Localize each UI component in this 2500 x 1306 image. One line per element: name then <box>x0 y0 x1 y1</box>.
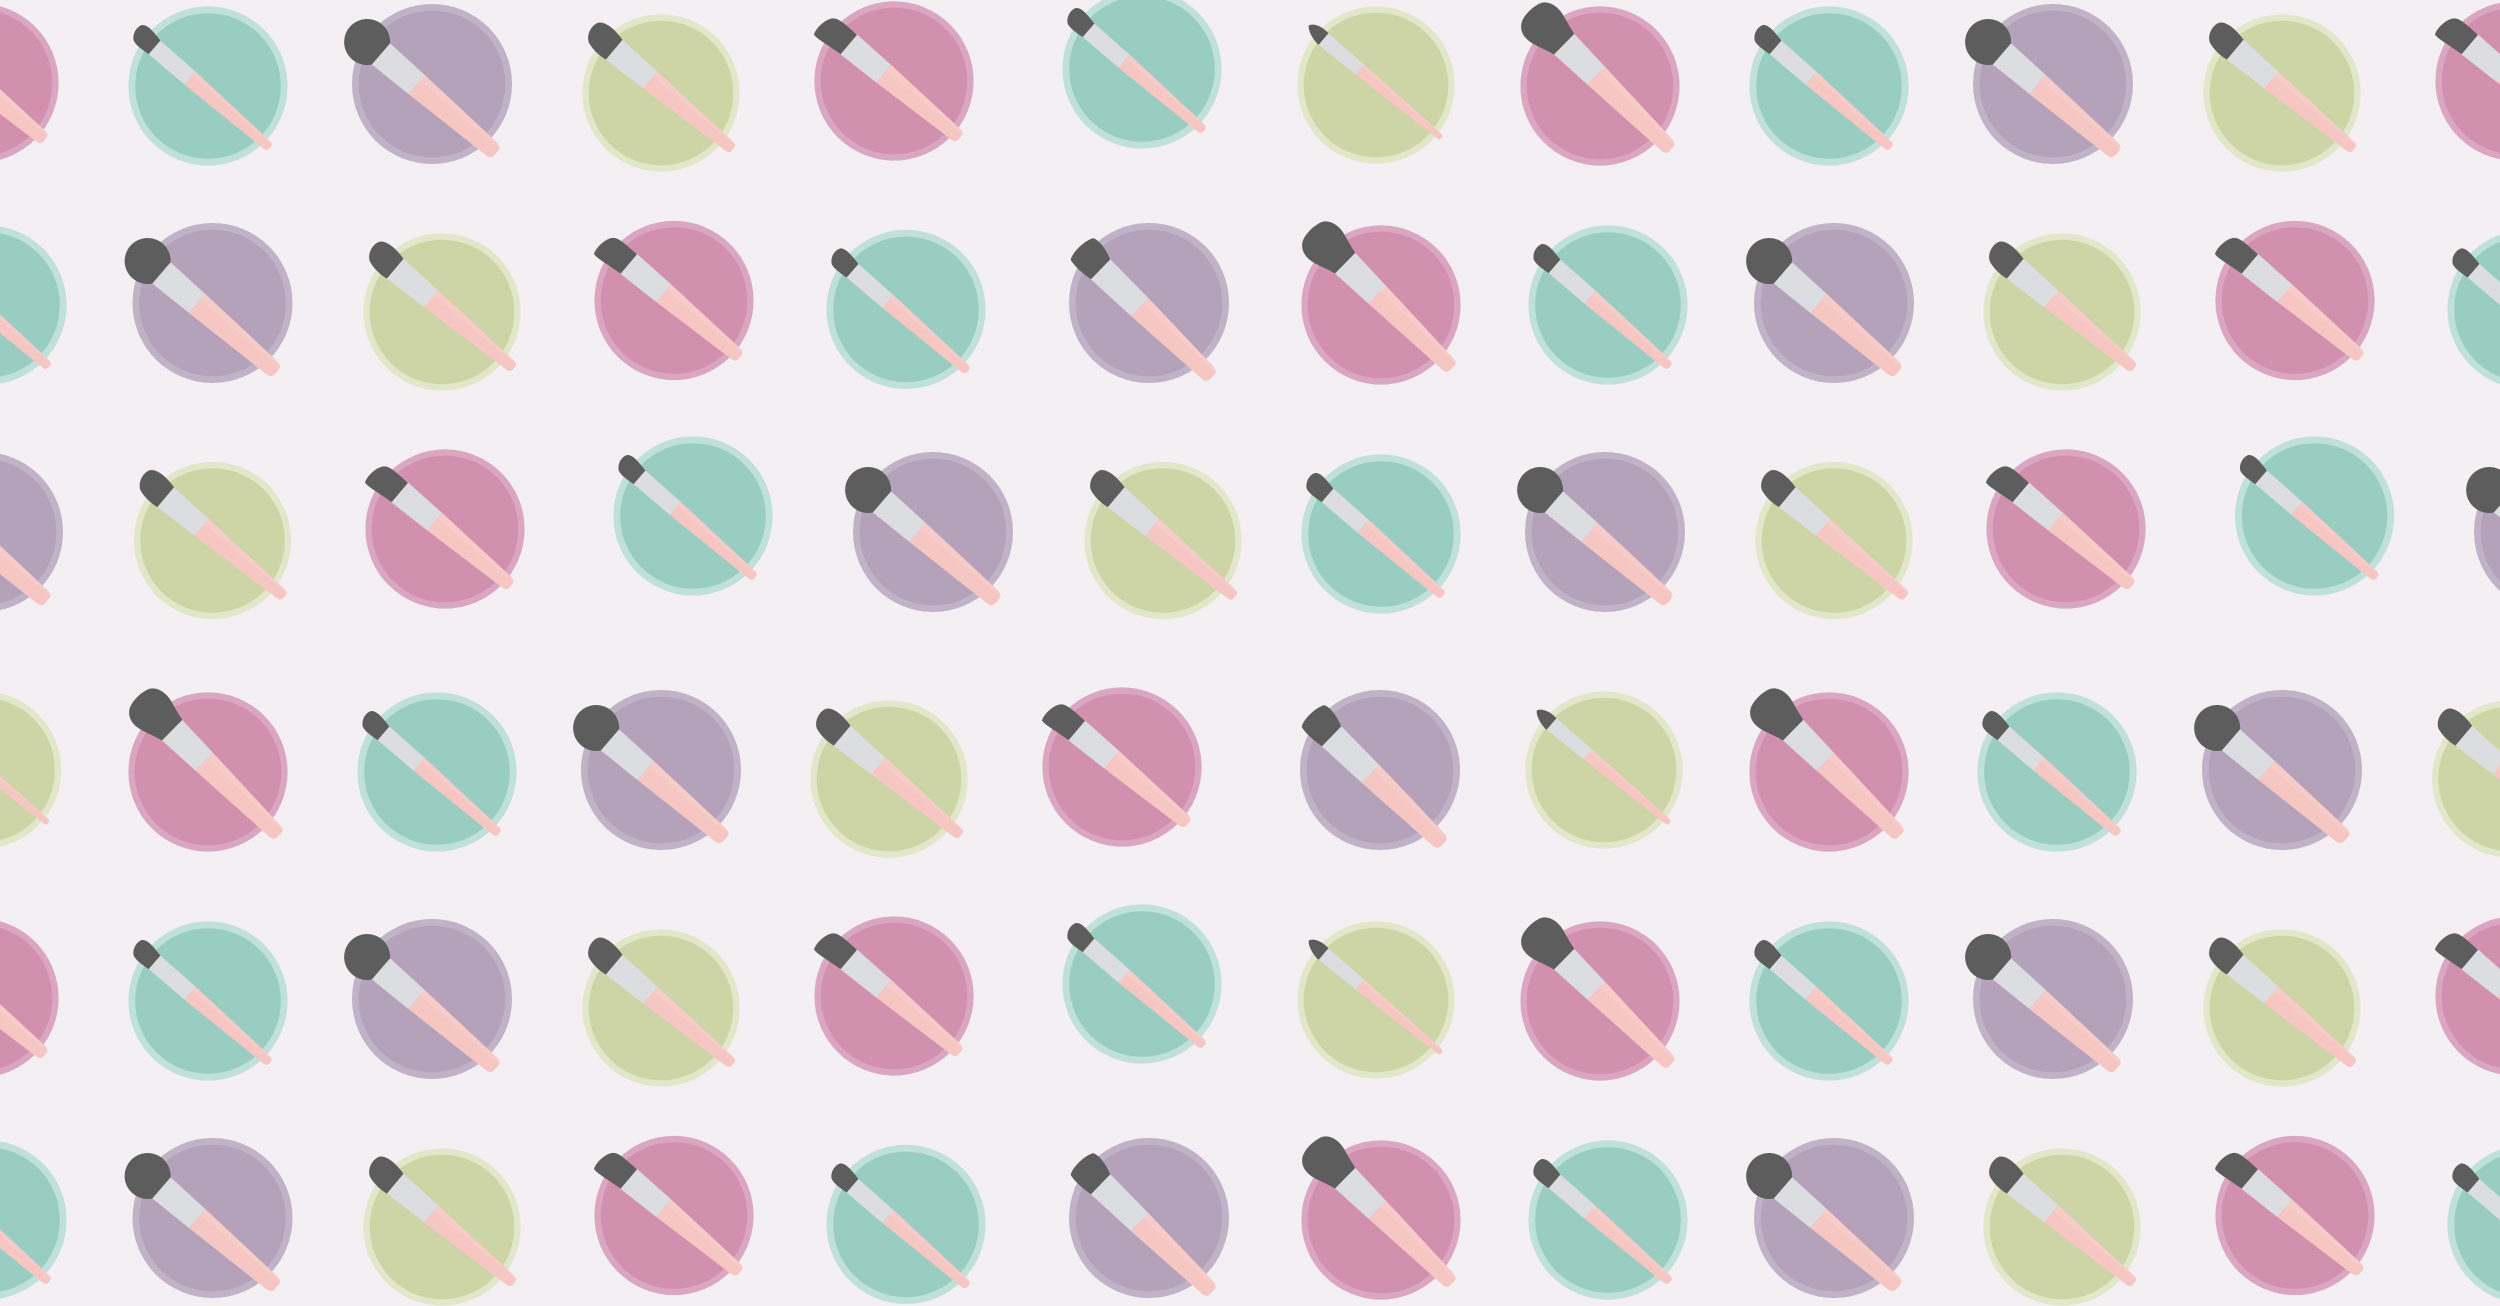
icon: teal disc with brush <box>826 1145 986 1304</box>
icon: purple disc with brush <box>1737 1138 1914 1304</box>
icon: green disc with brush <box>581 14 743 172</box>
icon: teal disc with brush <box>1062 904 1222 1064</box>
icon: pink disc with brush <box>593 221 754 380</box>
icon: teal disc with brush <box>826 230 986 389</box>
icon: purple disc with brush <box>115 223 293 389</box>
icon: green disc with brush <box>133 462 294 619</box>
icon: teal disc with brush <box>128 921 288 1081</box>
icon: green disc with thin brush <box>1297 6 1455 164</box>
icon: purple disc with brush <box>564 690 741 856</box>
icon: pink disc with brush <box>2214 221 2375 380</box>
icon: pink disc with brush <box>0 3 59 163</box>
icon: pink disc with brush <box>593 1136 754 1295</box>
icon: purple disc with brush <box>1737 223 1914 389</box>
icon: pink disc with brush <box>364 449 525 609</box>
icon: green disc with brush <box>1982 1148 2144 1306</box>
icon: green disc with brush <box>809 700 971 858</box>
icon: green disc with brush <box>1754 462 1916 619</box>
icon: teal disc with brush <box>1528 225 1688 385</box>
icon: pink disc with brush <box>2434 1 2500 161</box>
icon: pink disc with large brush <box>122 681 294 852</box>
icon: teal disc with brush <box>128 6 288 166</box>
icon: green disc with brush <box>2202 14 2364 172</box>
icon: green disc with brush <box>1083 462 1245 619</box>
icon: teal disc with brush <box>2447 230 2500 389</box>
icon: purple disc with brush <box>335 919 512 1085</box>
icon: purple disc with brush <box>335 4 512 170</box>
icon: green disc with brush <box>1982 233 2144 391</box>
icon: teal disc with brush <box>0 1140 67 1300</box>
icon: pink disc with large brush <box>1295 1129 1467 1300</box>
icon: purple disc with brush <box>2185 690 2362 856</box>
icon: purple disc with brush <box>0 452 63 618</box>
icon: teal disc with brush <box>1301 454 1461 614</box>
icon: purple disc with brush <box>1508 452 1685 618</box>
icon: teal disc with brush <box>1528 1140 1688 1300</box>
icon: purple disc with brush <box>1068 1138 1229 1303</box>
icon: purple disc with brush <box>1299 690 1460 855</box>
icon: pink disc with brush <box>813 916 974 1076</box>
icon: pink disc with brush <box>0 918 59 1078</box>
icon: pink disc with brush <box>1985 449 2146 609</box>
icon: purple disc with brush <box>836 452 1013 618</box>
icon: purple disc with brush <box>1068 223 1229 388</box>
icon: teal disc with brush <box>0 225 67 385</box>
icon: teal disc with brush <box>1749 921 1909 1081</box>
icon: green disc with brush <box>362 233 524 391</box>
icon: green disc with brush <box>2202 929 2364 1087</box>
icon: teal disc with brush <box>1062 0 1222 149</box>
icon: teal disc with brush <box>2235 436 2394 596</box>
icon: green disc with thin brush <box>1525 691 1683 849</box>
icon: teal disc with brush <box>1749 6 1909 166</box>
icon: teal disc with brush <box>1977 692 2137 852</box>
icon: pink disc with large brush <box>1743 681 1915 852</box>
icon: teal disc with brush <box>357 692 517 852</box>
icon: green disc with thin brush <box>0 691 61 849</box>
icon: purple disc with brush <box>1956 4 2133 170</box>
icon: pink disc with brush <box>813 1 974 161</box>
icon: pink disc with brush <box>1041 687 1202 847</box>
icon: green disc with brush <box>362 1148 524 1306</box>
icon: purple disc with brush <box>115 1138 293 1304</box>
icon: teal disc with brush <box>2447 1145 2500 1304</box>
icon: pink disc with large brush <box>1295 214 1467 385</box>
icon: green disc with brush <box>2431 700 2500 858</box>
icon: pink disc with large brush <box>1514 0 1686 166</box>
icon: pink disc with brush <box>2214 1136 2375 1295</box>
icon: purple disc with brush <box>2457 452 2500 618</box>
icon: pink disc with brush <box>2434 916 2500 1076</box>
icon: purple disc with brush <box>1956 919 2133 1085</box>
icon: teal disc with brush <box>613 436 773 596</box>
icon: green disc with thin brush <box>1297 921 1455 1079</box>
icon: green disc with brush <box>581 929 743 1087</box>
icon: pink disc with large brush <box>1514 910 1686 1081</box>
